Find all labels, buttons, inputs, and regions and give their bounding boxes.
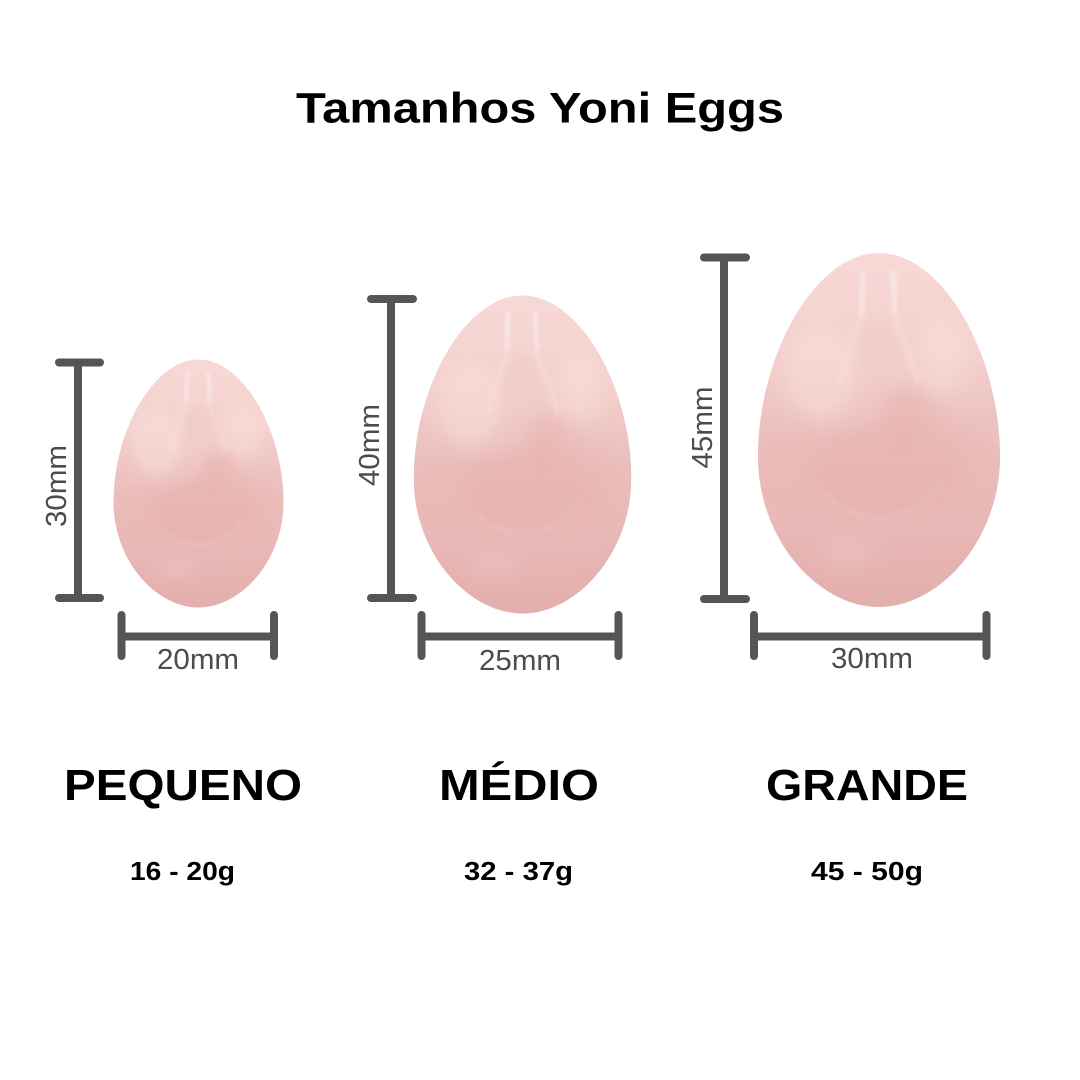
icon: small rose quartz egg bbox=[111, 357, 286, 614]
weight: pequeno: 16 - 20g bbox=[130, 858, 235, 886]
icon: medium rose quartz egg bbox=[410, 292, 634, 621]
title: Tamanhos Yoni Eggs bbox=[296, 84, 784, 132]
dimension: large egg width bbox=[754, 615, 986, 675]
dimension: medium egg width: 25mm bbox=[479, 645, 561, 677]
dimension: medium egg height: 40mm bbox=[354, 404, 386, 486]
label: pequeno: PEQUENO bbox=[64, 761, 302, 810]
dimension: medium egg width bbox=[422, 615, 618, 677]
dimension: small egg width: 20mm bbox=[157, 644, 239, 676]
panel: medium egg bbox=[354, 292, 634, 886]
label: médio: MÉDIO bbox=[439, 760, 599, 810]
icon: large rose quartz egg bbox=[754, 249, 1004, 616]
dimension: large egg width: 30mm bbox=[831, 643, 913, 675]
dimension: small egg height bbox=[41, 362, 100, 598]
dimension: large egg height: 45mm bbox=[687, 386, 719, 468]
dimension: large egg height bbox=[687, 258, 746, 599]
dimension: medium egg height bbox=[354, 299, 413, 598]
dimension: small egg height: 30mm bbox=[41, 445, 73, 527]
weight: grande: 45 - 50g bbox=[811, 858, 923, 886]
dimension: small egg width bbox=[122, 615, 274, 676]
panel: small egg bbox=[41, 357, 302, 886]
weight: médio: 32 - 37g bbox=[464, 858, 573, 886]
label: grande: GRANDE bbox=[766, 761, 968, 810]
panel: large egg bbox=[687, 249, 1004, 886]
